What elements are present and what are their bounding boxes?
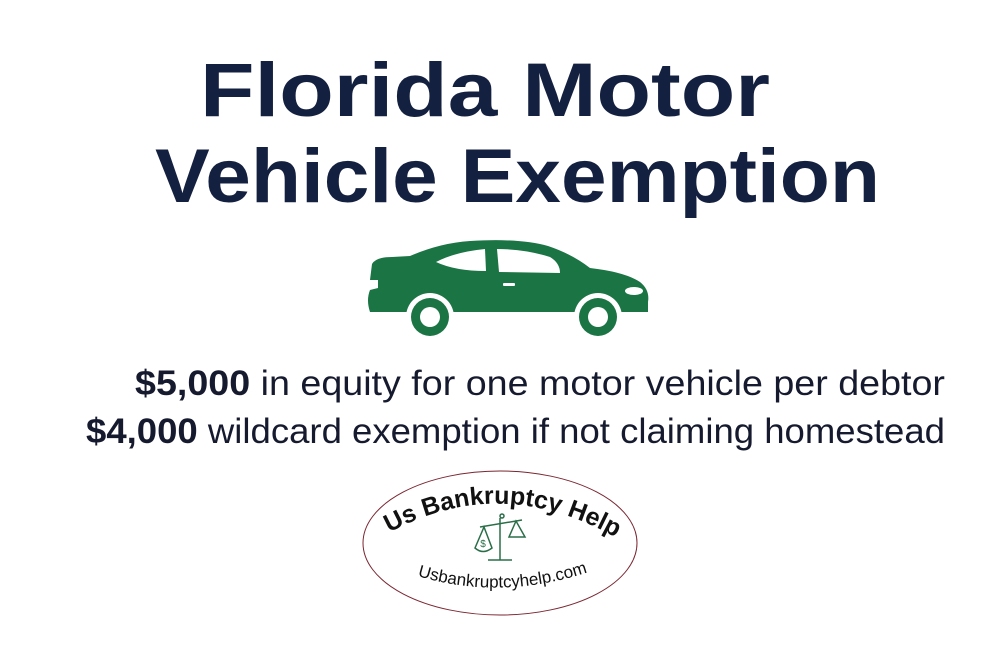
text block: exemptions: $4,000 wildcard exemption if not claiming homestead	[86, 412, 945, 451]
title	[155, 48, 880, 219]
text block: exemptions: $5,000 in equity for one motor vehicle per debtor	[135, 364, 945, 403]
logo: Us Bankruptcy Help: Usbankruptcyhelp.com	[420, 564, 587, 591]
title: Florida Motor	[200, 48, 770, 133]
logo: Us Bankruptcy Help: $	[480, 539, 486, 550]
title: Vehicle Exemption	[155, 134, 880, 219]
icon: car	[368, 240, 648, 341]
logo: Us Bankruptcy Help	[362, 470, 638, 616]
text block: exemptions	[86, 364, 945, 451]
logo: Us Bankruptcy Help: Us Bankruptcy Help	[382, 486, 620, 538]
icon: scales	[475, 514, 525, 560]
